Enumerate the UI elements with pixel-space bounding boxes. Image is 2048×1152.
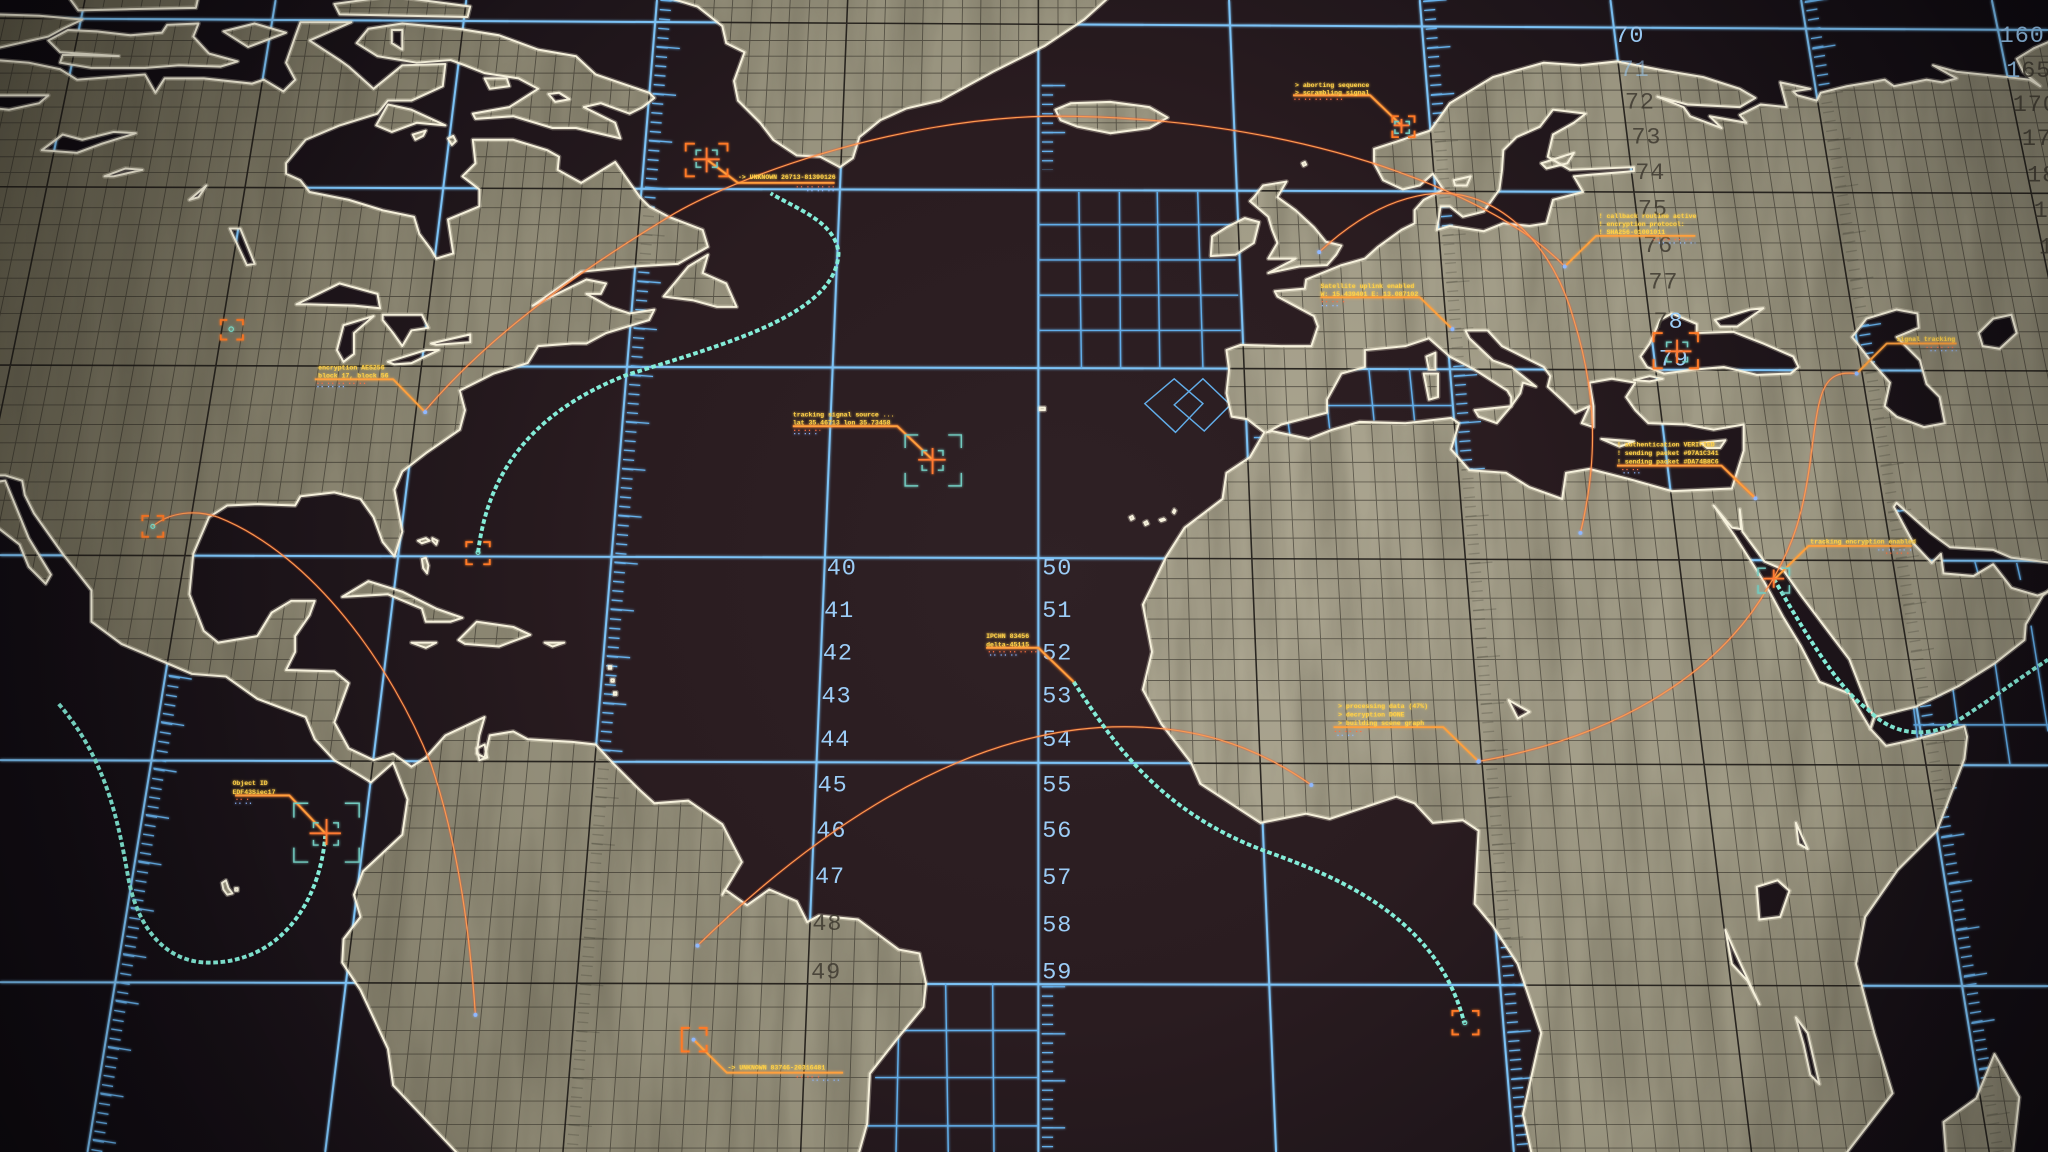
box grid: Mediterranean xyxy=(1254,368,1452,439)
numeric scale: column 70-79: 79 xyxy=(1659,347,1689,374)
icon: double diamond marker xyxy=(1145,379,1230,432)
callout: signal tracking xyxy=(1855,336,1957,376)
callout: tracking signal source: lat 35.46713 lon 35.73458 xyxy=(793,419,891,426)
target bracket: Red Sea xyxy=(1758,568,1789,593)
callout: authentication: ! sending packet #97A1C341 xyxy=(1617,450,1719,457)
callout: authentication xyxy=(1617,442,1757,500)
callout: encryption AES256: block 17, block 56 xyxy=(318,372,389,379)
arc: Central Asia to Central Africa xyxy=(1479,373,1856,761)
numeric scale: column 70-79 xyxy=(1614,23,1689,374)
callout: processing data: > building scene graph xyxy=(1338,720,1424,727)
callout: signal tracking: signal tracking xyxy=(1896,336,1955,343)
box grid: mid Atlantic xyxy=(1038,192,1241,368)
numeric scale: column 50-59 xyxy=(1042,556,1072,986)
arc: Midwest to Scandinavia to Russia xyxy=(424,116,1565,411)
numeric scale: column 70-79: 72 xyxy=(1625,89,1655,116)
arc end points xyxy=(473,250,1582,1017)
arc: Brazil to West Africa xyxy=(697,727,1311,946)
callout: callback routine: ! encryption protocol: xyxy=(1599,221,1685,228)
numeric scale: column 40-49: 42 xyxy=(823,641,853,668)
callout: processing data xyxy=(1334,703,1481,764)
callout: object ID xyxy=(232,780,359,862)
numeric scale: column 70-79: 77 xyxy=(1648,270,1678,297)
numeric scale: column 40-49: 44 xyxy=(820,727,850,754)
numeric scale: column 40-49 xyxy=(811,556,857,986)
target: Black Sea xyxy=(1654,333,1698,368)
callout: tracking encryption xyxy=(1758,538,1916,593)
numeric scale: column 70-79: 75 xyxy=(1638,197,1668,224)
numeric scale: column 70-79: 76 xyxy=(1643,233,1673,260)
target bracket xyxy=(682,1028,707,1051)
numeric scale: column 50-59: 50 xyxy=(1042,556,1072,583)
callout: aborting sequence xyxy=(1293,82,1415,137)
callout: authentication: ! sending packet #DA74B8C6 xyxy=(1617,459,1719,466)
numeric scale: column 50-59: 56 xyxy=(1042,818,1072,845)
numeric scale: column 160-190: 160 xyxy=(2000,23,2045,50)
numeric scale: column 50-59: 54 xyxy=(1042,727,1072,754)
callout: processing data: > processing data (47%) xyxy=(1338,703,1428,710)
numeric scale: column 40-49: 46 xyxy=(816,818,846,845)
callout: unknown signal near Greenland: -> UNKNOWN 26713-81390126 xyxy=(738,174,836,181)
callout: callback routine: ! SHA256-01001011 xyxy=(1599,229,1665,236)
numeric scale: column 50-59: 57 xyxy=(1042,865,1072,892)
callout: processing data: > decryption DONE xyxy=(1338,711,1405,718)
numeric scale: column 40-49: 45 xyxy=(818,773,848,800)
target: South Atlantic xyxy=(1452,1011,1479,1034)
numeric scale: column 70-79: 74 xyxy=(1635,160,1665,187)
callout: unknown signal near Greenland xyxy=(686,144,836,191)
dashed route: Red Sea to Arabian Sea xyxy=(1774,579,2048,732)
callout: satellite uplink xyxy=(1320,283,1454,331)
target bracket xyxy=(294,803,359,862)
target: Mexico xyxy=(142,516,163,537)
target bracket xyxy=(686,144,728,176)
target bracket xyxy=(1392,116,1415,137)
callout: tracking encryption: tracking encryption enabled xyxy=(1810,538,1916,545)
callout: tracking signal source xyxy=(793,412,961,486)
numeric scale: column 50-59: 51 xyxy=(1042,598,1072,625)
numeric scale: column 40-49: 40 xyxy=(827,556,857,583)
callout: IPCHN delta: delta-45115 xyxy=(986,642,1029,649)
numeric scale: column 50-59: 55 xyxy=(1042,773,1072,800)
numeric scale: column 40-49: 41 xyxy=(824,598,854,625)
arc: Mexico to Bolivia xyxy=(153,513,475,1015)
callout: object ID: EDF43Siec17 xyxy=(232,789,276,796)
callout: callback routine: ! callback routine active xyxy=(1599,213,1697,220)
numeric scale: column 50-59: 58 xyxy=(1042,912,1072,939)
callout: authentication: ! authentication VERIFIED xyxy=(1617,442,1715,449)
callout: satellite uplink: W: 15.439401 E: 13.087102 xyxy=(1320,291,1418,298)
dashed route: East Pacific loop xyxy=(59,704,325,963)
target: Caribbean xyxy=(466,542,490,564)
callout: aborting sequence: > aborting sequence xyxy=(1295,82,1369,89)
callout: aborting sequence: > scrambling signal xyxy=(1295,90,1369,97)
box grid: South Atlantic xyxy=(867,984,1038,1152)
numeric scale: column 40-49: 43 xyxy=(822,684,852,711)
callout: satellite uplink: Satellite uplink enabled xyxy=(1320,283,1414,290)
callout: IPCHN delta: IPCHN 83456 xyxy=(986,633,1029,640)
callout: unknown signal in Brazil xyxy=(682,1028,843,1080)
box grid: Arabian Sea xyxy=(1913,562,2048,765)
callout: object ID: Object ID xyxy=(232,780,268,787)
callout: unknown signal in Brazil: -> UNKNOWN 83746-20316481 xyxy=(728,1065,825,1072)
callout: tracking signal source: tracking signal source ... xyxy=(793,412,894,419)
dashed route: Caribbean to Greenland xyxy=(478,193,839,552)
numeric scale: column 70-79: 70 xyxy=(1614,23,1644,50)
dashed route: Atlantic to South Africa xyxy=(1074,682,1464,1023)
callout: IPCHN delta xyxy=(986,633,1074,682)
callout: encryption AES256: encryption AES256 xyxy=(318,365,385,372)
numeric scale: column 160-190 xyxy=(2000,23,2048,261)
arc: London to Libya xyxy=(1319,193,1593,533)
target bracket xyxy=(905,435,961,486)
numeric scale: column 70-79: 78 xyxy=(1654,309,1684,336)
numeric scale: column 40-49: 47 xyxy=(815,864,845,891)
numeric scale: column 70-79: 71 xyxy=(1620,57,1650,84)
numeric scale: column 50-59: 52 xyxy=(1042,641,1072,668)
target: Canada xyxy=(221,320,243,340)
callout: encryption AES256 xyxy=(315,365,427,414)
numeric scale: column 40-49: 49 xyxy=(811,959,841,986)
numeric scale: column 70-79: 73 xyxy=(1631,125,1661,152)
callout: callback routine xyxy=(1563,213,1697,268)
callouts and targets overlay xyxy=(142,82,1957,1080)
numeric scale: column 50-59: 53 xyxy=(1042,684,1072,711)
numeric scale: column 50-59: 59 xyxy=(1042,959,1072,986)
numeric scale: column 40-49: 48 xyxy=(812,911,842,938)
